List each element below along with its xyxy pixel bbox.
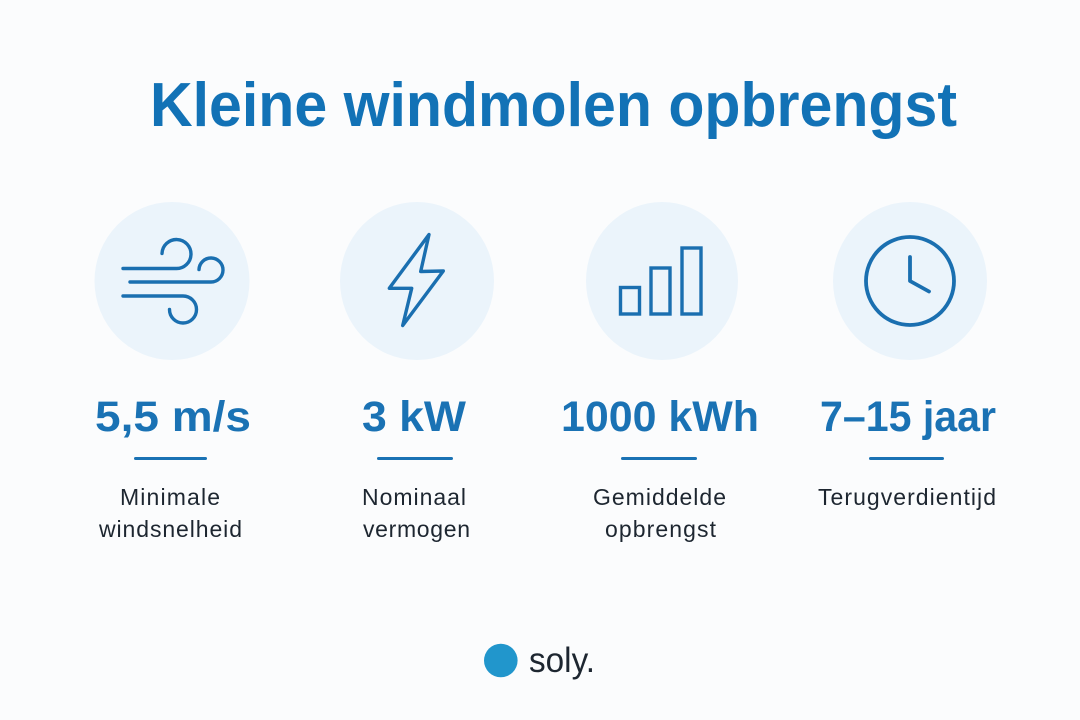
value: 3 kW: 3 kW <box>362 393 466 441</box>
label: gemiddelde opbrengst <box>593 484 726 542</box>
icon: clock <box>833 202 987 360</box>
label: nominaal vermogen <box>362 484 470 542</box>
value: 7–15 jaar: 7–15 jaar <box>820 393 996 441</box>
label: terugverdientijd: Terugverdientijd <box>818 484 996 510</box>
label: gemiddelde opbrengst: opbrengst <box>605 516 717 542</box>
value: 1000 kWh: 1000 kWh <box>561 393 759 441</box>
label: nominaal vermogen: vermogen <box>363 516 470 542</box>
panel: nominaal vermogen <box>340 202 494 542</box>
label: nominaal vermogen: Nominaal <box>362 484 466 510</box>
label: minimale windsnelheid: windsnelheid <box>98 516 242 542</box>
title: Kleine windmolen opbrengst <box>150 71 957 140</box>
value: 5,5 m/s: 5,5 m/s <box>95 393 251 441</box>
logo: soly <box>484 641 595 680</box>
icon: lightning bolt <box>340 202 494 360</box>
icon: wind <box>94 202 250 360</box>
panel: gemiddelde opbrengst <box>561 202 759 542</box>
panel: terugverdientijd <box>818 202 996 510</box>
label: gemiddelde opbrengst: Gemiddelde <box>593 484 726 510</box>
label: minimale windsnelheid: Minimale <box>120 484 220 510</box>
panel: minimale windsnelheid <box>94 202 251 542</box>
logo: soly: soly. <box>529 641 595 680</box>
icon: bar chart <box>586 202 738 360</box>
label: minimale windsnelheid <box>98 484 242 542</box>
